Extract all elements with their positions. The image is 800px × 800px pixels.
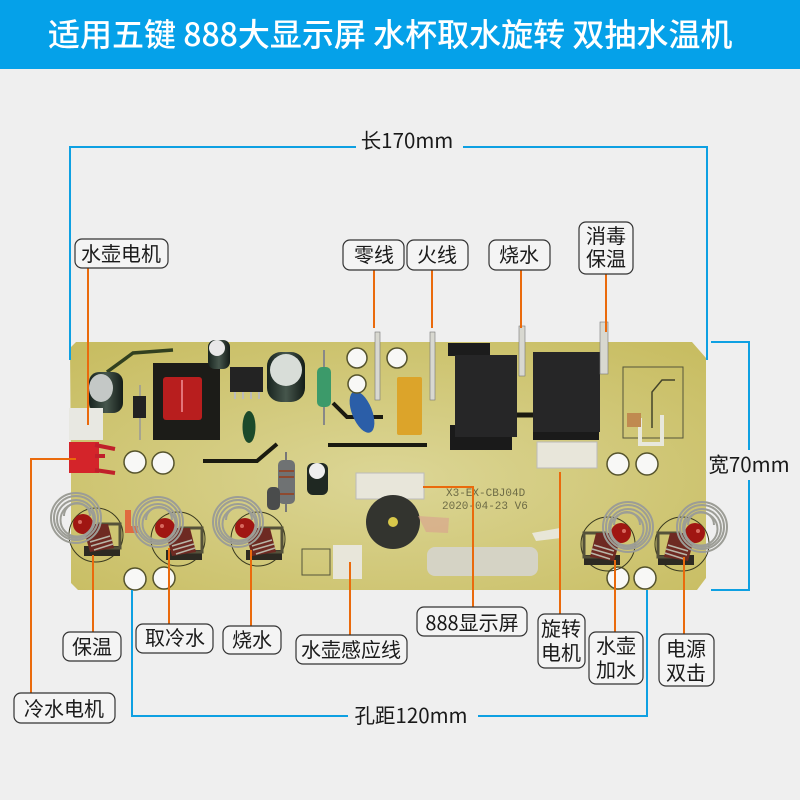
length label: 长170mm [361, 124, 453, 154]
callout: kettle fill: 水壶 [596, 630, 636, 659]
callout: kettle sensor wire [296, 562, 407, 664]
callout: boil top [489, 239, 550, 328]
callout: rotary motor: 电机 [541, 637, 581, 666]
diode [133, 385, 146, 440]
heater footprint [623, 367, 683, 444]
mounting holes [124, 348, 658, 590]
callout: disinfect keep warm: 保温 [586, 243, 626, 272]
title banner [0, 0, 800, 69]
large capacitor [267, 352, 305, 402]
hole spacing label: 孔距120mm [354, 699, 468, 729]
resistor [278, 452, 295, 512]
callout: neutral wire: 零线 [354, 239, 394, 268]
kettle sensor connector [333, 545, 362, 579]
callout: cold water: 取冷水 [145, 622, 205, 651]
left electrolytic capacitor [89, 372, 123, 413]
width label: 宽70mm [708, 448, 790, 478]
red connector [69, 442, 115, 473]
callout: power double press [659, 557, 714, 686]
callout: boil: 烧水 [232, 624, 272, 653]
callout: cold water motor: 冷水电机 [24, 693, 104, 722]
board version text: X3-EX-CBJ04D [446, 488, 526, 500]
relay 1 [448, 343, 517, 450]
callout: kettle fill: 加水 [596, 654, 636, 683]
888 display connector [356, 473, 424, 499]
transistor [267, 487, 280, 510]
white smudge [532, 528, 561, 541]
dimension: hole spacing 120mm [132, 590, 647, 729]
title: 适用五键 888大显示屏 水杯取水旋转 双抽水温机 [48, 10, 732, 56]
barcode label [427, 547, 538, 576]
callout: cold water motor [14, 459, 115, 723]
copper traces [203, 403, 427, 461]
callout: neutral wire [343, 239, 404, 328]
green inductor [317, 350, 331, 425]
dimension: length 170mm [70, 124, 707, 360]
callout: power double press: 电源 [666, 633, 706, 662]
callout: disinfect keep warm [579, 220, 633, 332]
small capacitor [307, 463, 328, 495]
callout: keep warm [63, 555, 121, 661]
callout: boil top: 烧水 [499, 239, 539, 268]
callout: 888 display [417, 487, 527, 636]
yellow capacitor [397, 377, 422, 435]
buzzer [366, 495, 420, 549]
callout: boil [223, 550, 281, 654]
terminals [375, 322, 608, 400]
callout: rotary motor: 旋转 [541, 613, 581, 642]
pink ink [418, 516, 449, 533]
callout: live wire [407, 239, 468, 328]
sensor footprint [302, 549, 330, 575]
callout: live wire: 火线 [417, 239, 457, 268]
switch springs [51, 493, 727, 571]
dimension: width 70mm [708, 342, 790, 590]
callout: rotary motor [538, 472, 585, 668]
white connector [69, 408, 103, 440]
callout: 888 display: 888显示屏 [425, 607, 519, 636]
callout: power double press: 双击 [666, 657, 706, 686]
callout: disinfect keep warm: 消毒 [586, 220, 626, 249]
pcb substrate [70, 342, 706, 590]
motor connector [537, 442, 597, 468]
callout: kettle sensor wire: 水壶感应线 [301, 634, 401, 663]
callout: kettle motor [75, 238, 168, 425]
board date text: 2020-04-23 V6 [442, 501, 528, 513]
small green capacitor [242, 411, 256, 443]
top capacitor [208, 340, 230, 369]
callout: kettle fill [589, 560, 643, 684]
relay 2 [533, 352, 600, 440]
red ink [125, 510, 138, 533]
transformer [153, 363, 220, 440]
callout: keep warm: 保温 [72, 631, 112, 660]
callout: cold water [136, 548, 213, 653]
callout: kettle motor: 水壶电机 [81, 238, 161, 267]
circuit board photo [51, 322, 727, 590]
chip [230, 367, 263, 399]
blue capacitor [344, 388, 380, 436]
